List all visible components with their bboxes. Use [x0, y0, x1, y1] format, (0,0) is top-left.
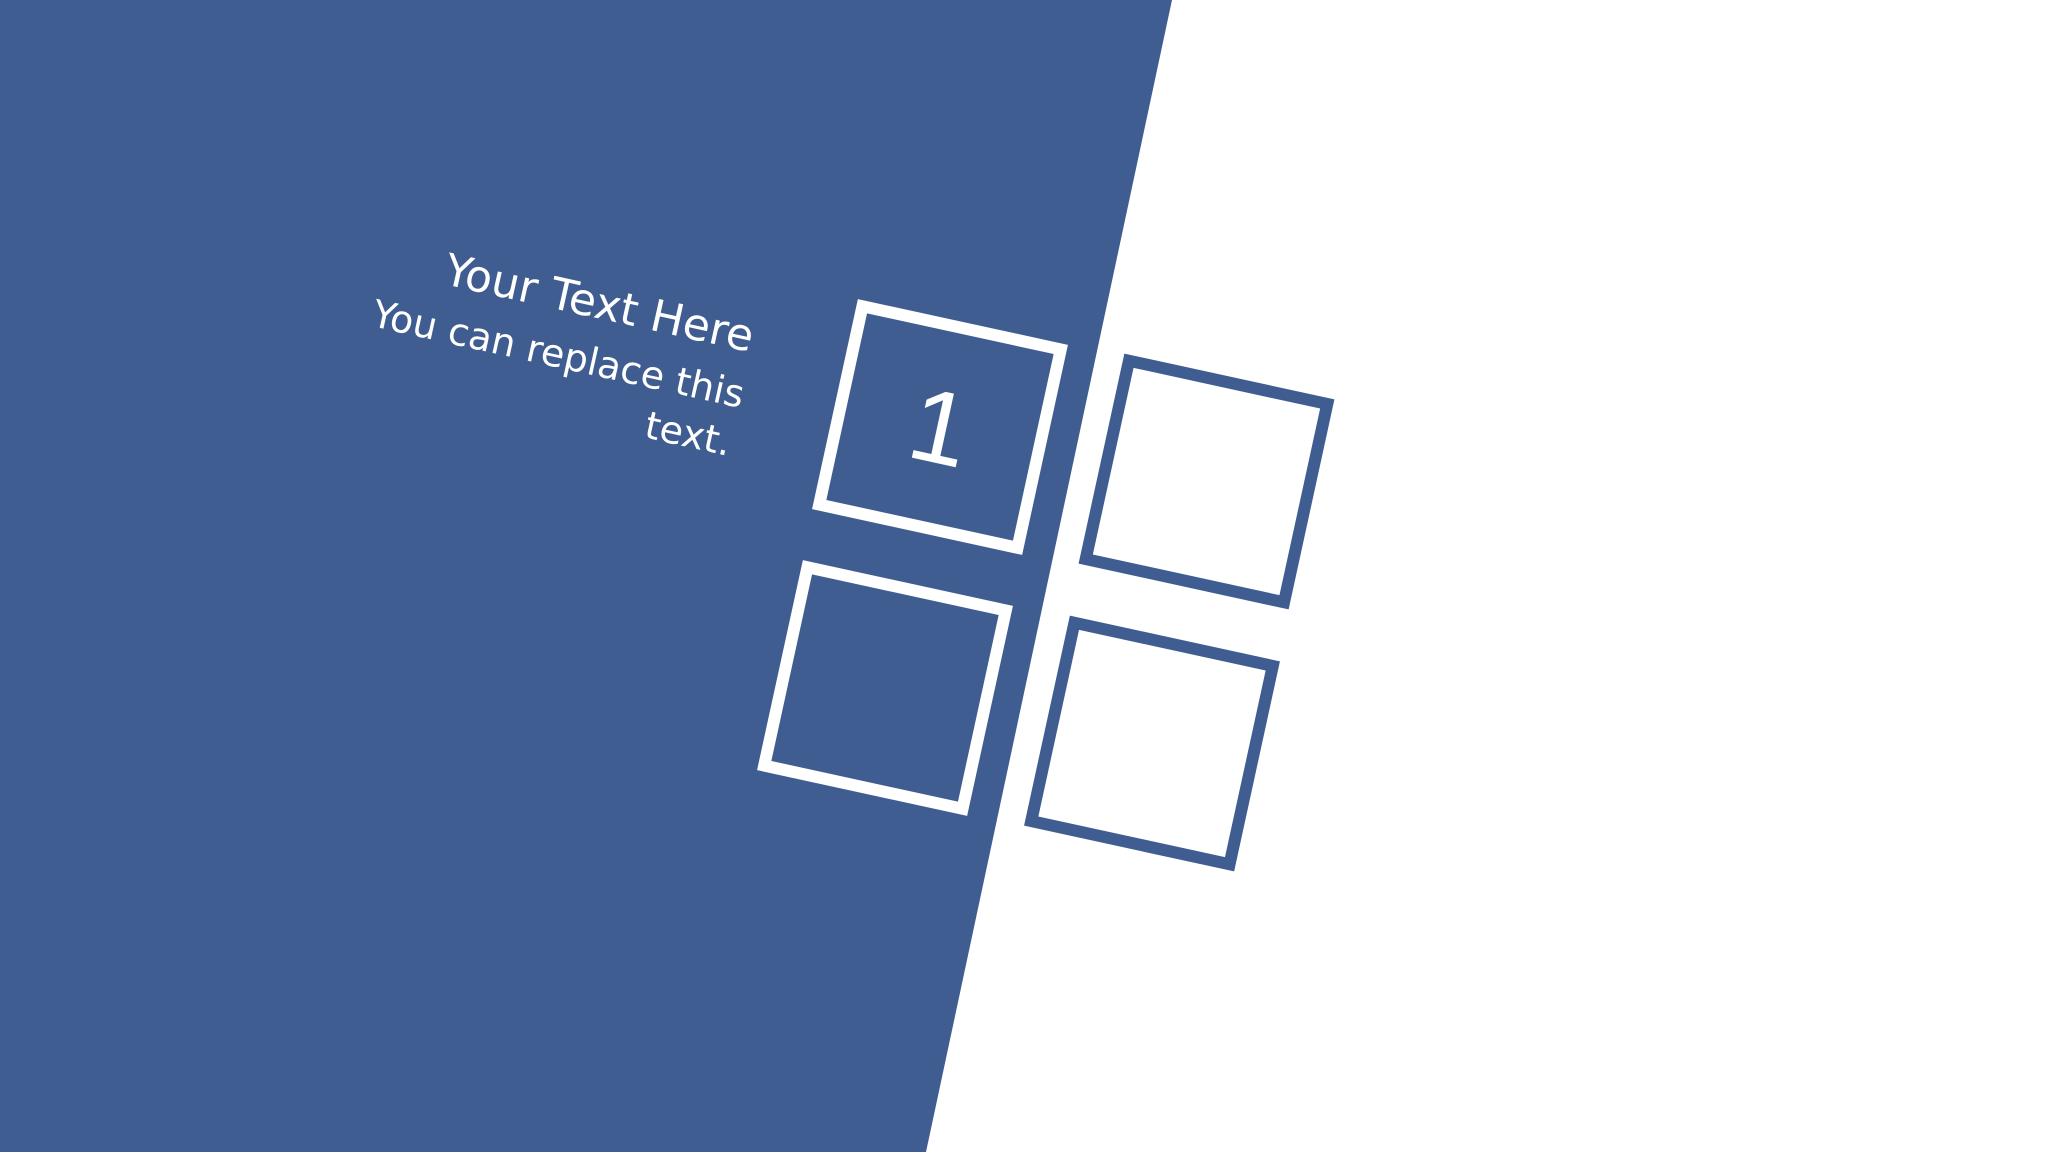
text block: text. [641, 403, 736, 465]
text block [367, 244, 759, 465]
square 4 [1031, 623, 1273, 864]
square 1 with number: 1 [899, 365, 980, 491]
square 2 [1086, 361, 1327, 602]
square 3 [764, 567, 1006, 809]
text block: Your Text Here [439, 244, 759, 363]
square 1 with number [819, 306, 1061, 548]
blue background panel [0, 0, 1172, 1152]
text block: You can replace this [367, 291, 749, 417]
